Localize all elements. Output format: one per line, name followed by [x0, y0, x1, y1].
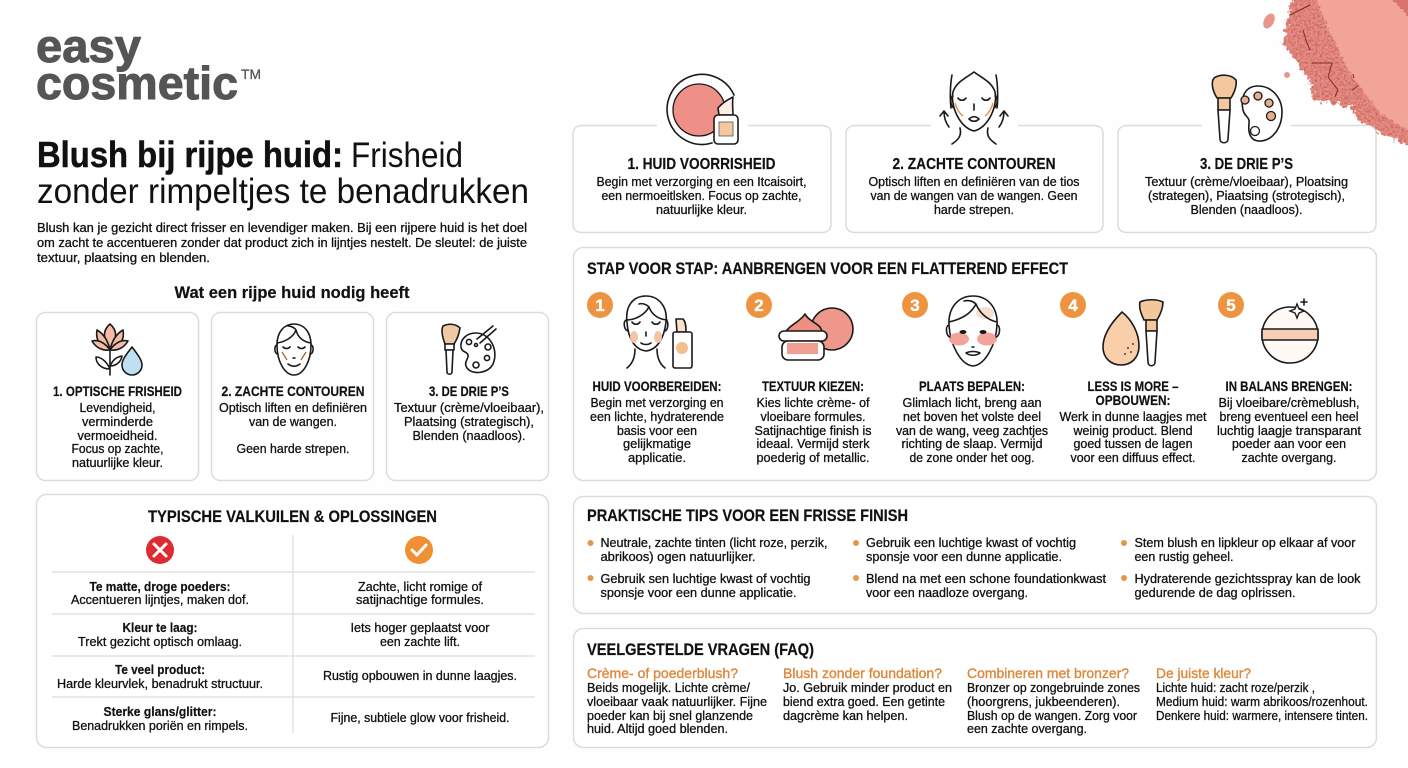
badge 4: 4 — [1068, 296, 1078, 315]
step 5 text: breng eventueel een heel — [1220, 409, 1359, 424]
logo: TM — [241, 66, 261, 82]
intro text: textuur, plaatsing en blenden. — [37, 250, 210, 265]
panel heading: TYPISCHE VALKUILEN & OPLOSSINGEN — [148, 508, 437, 526]
faq: zonder foundation: Jo. Gebruik minder product en — [783, 680, 952, 695]
row: kleur te laag: een zachte lift. — [380, 634, 460, 649]
step 1 text — [590, 378, 724, 465]
faq: creme of poeder: Crème- of poederblush? — [587, 665, 738, 681]
step 3 text: richting de slaap. Vermijd — [902, 436, 1042, 451]
heading: what mature skin needs: Wat een rijpe huid nodig heeft — [174, 283, 410, 302]
step 1 text: gelijkmatige — [623, 436, 691, 451]
logo: easy — [36, 20, 141, 72]
icon: powder puff with sparkle — [1262, 299, 1318, 363]
faq: bronzer: Combineren met bronzer? — [967, 665, 1129, 681]
row: sterke glans: Sterke glans/glitter: — [104, 704, 216, 719]
step 5 text: IN BALANS BRENGEN: — [1226, 378, 1352, 394]
row: te veel product — [57, 662, 517, 691]
faq: juiste kleur — [1156, 665, 1368, 723]
text block: 1. HUID VOORRISHEID — [628, 156, 776, 173]
step 2 text: vloeibare formules. — [760, 409, 866, 424]
text block — [219, 383, 367, 456]
faq: juiste kleur: De juiste kleur? — [1156, 665, 1251, 681]
badge 3 — [902, 292, 928, 318]
step 3 text — [896, 378, 1048, 465]
text block: vermoeidheid. — [78, 428, 158, 443]
text block: Focus op zachte, — [72, 441, 164, 456]
tip column 3: Stem blush en lipkleur op elkaar af voor — [1134, 535, 1356, 550]
text block: verminderde — [82, 414, 153, 429]
text block: Optisch liften en definiëren van de tios — [868, 174, 1080, 189]
icon: face with lifting arrows — [940, 72, 1008, 144]
step 3 text: van de wang, veeg zachtjes — [896, 423, 1048, 438]
text block — [1145, 156, 1348, 217]
row: sterke glans: Benadrukken poriën en rimpels. — [72, 718, 248, 733]
text block: Levendigheid, — [80, 400, 156, 415]
step 2 text — [754, 378, 872, 465]
text block: harde strepen. — [934, 202, 1014, 217]
text block — [868, 156, 1080, 217]
step 3 text: net boven het volste deel — [903, 409, 1041, 424]
faq: zonder foundation: dagcrème kan helpen. — [783, 708, 908, 723]
icon: face with cheek placement — [946, 296, 1000, 366]
tip column 1: sponsje voor een dunne applicatie. — [600, 585, 796, 600]
step 3 text: de zone onder het oog. — [910, 450, 1034, 465]
faq: creme of poeder: vloeibaar vaak natuurlijker. Fijne — [587, 694, 767, 709]
title: zonder rimpeltjes te benadrukken — [37, 172, 529, 211]
icon: blush and bottle — [667, 74, 738, 144]
blush powder swatch — [1261, 0, 1408, 150]
step 2 text: Satijnachtige finish is — [754, 423, 872, 438]
row: te veel product: Te veel product: — [115, 662, 205, 677]
faq: juiste kleur: Lichte huid: zacht roze/perzik , — [1156, 680, 1315, 695]
badge 2 — [746, 292, 772, 318]
panel: huid voorrisheid — [573, 74, 831, 232]
tip column 2: voor een naadloze overgang. — [866, 585, 1028, 600]
row: te veel product: Harde kleurvlek, benadrukt structuur. — [57, 676, 263, 691]
text block: 2. ZACHTE CONTOUREN — [222, 383, 364, 399]
faq: creme of poeder — [587, 665, 767, 736]
step 1 — [587, 292, 724, 465]
row: sterke glans: Fijne, subtiele glow voor frisheid. — [330, 710, 510, 725]
step 3 text: Glimlach licht, breng aan — [902, 395, 1042, 410]
badge 5 — [1218, 292, 1244, 318]
faq: bronzer: een zachte overgang. — [967, 721, 1087, 736]
step 4 text — [1060, 378, 1207, 465]
text block: Geen harde strepen. — [236, 441, 350, 456]
step 5 text: poeder aan voor een — [1232, 436, 1346, 451]
step 3 — [896, 292, 1048, 465]
step 4 text: voor een diffuus effect. — [1070, 450, 1196, 465]
panel heading: PRAKTISCHE TIPS VOOR EEN FRISSE FINISH — [587, 506, 908, 525]
text block: 3. DE DRIE P’S — [429, 383, 509, 399]
faq: juiste kleur: Denkere huid: warmere, intensere tinten. — [1156, 708, 1368, 723]
panel heading: STAP VOOR STAP: AANBRENGEN VOOR EEN FLATTEREND EFFECT — [587, 259, 1069, 278]
text block: 3. DE DRIE P’S — [1200, 156, 1293, 173]
row: te matte poeders: Zachte, licht romige of — [358, 579, 482, 594]
step 2 text: poederig of metallic. — [756, 450, 870, 465]
step 2 text: Kies lichte crème- of — [756, 395, 870, 410]
step 1 text: Begin met verzorging en — [590, 395, 724, 410]
badge 2: 2 — [754, 296, 764, 315]
row: te matte poeders — [71, 579, 484, 607]
step 4 — [1060, 292, 1207, 465]
icon: lotus and water drop — [92, 324, 142, 375]
badge 5: 5 — [1226, 296, 1236, 315]
tip column 1: Gebruik sen luchtige kwast of vochtig — [600, 571, 810, 586]
badge 3: 3 — [910, 296, 920, 315]
step 4 text: goed tussen de lagen — [1074, 436, 1192, 451]
panel: zachte contouren — [212, 312, 374, 480]
text block: Textuur (crème/vloeibaar), Ploatsing — [1145, 174, 1348, 189]
icon: face and bottle — [624, 296, 692, 368]
faq: creme of poeder: Beids mogelijk. Lichte crème/ — [587, 680, 750, 695]
step 5 text: luchtig laagje transparant — [1217, 423, 1361, 438]
tip column 2: Blend na met een schone foundationkwast — [866, 571, 1106, 586]
text block: 2. ZACHTE CONTOUREN — [892, 156, 1056, 173]
tip column 3 — [1121, 535, 1361, 600]
icon: brush and palette — [442, 324, 496, 374]
text block: Plaatsing (strategisch), — [404, 414, 534, 429]
faq: bronzer: (hoorgrens, jukbeenderen). — [967, 694, 1120, 709]
text block: Begin met verzorging en een Itcaisoirt, — [596, 174, 806, 189]
panel: stap voor stap — [574, 248, 1376, 480]
logo: cosmetic — [36, 57, 238, 109]
tip column 2: Gebruik een luchtige kwast of vochtig — [866, 535, 1076, 550]
text block — [394, 383, 544, 443]
icon: sponge and brush — [1103, 300, 1163, 366]
text block: een nermoeitlsken. Focus op zachte, — [602, 188, 802, 203]
panel: praktische tips — [574, 496, 1376, 614]
icon: cream jar and compact — [779, 308, 853, 360]
faq: creme of poeder: huid. Altijd goed blenden. — [587, 721, 728, 736]
icon: cross — [146, 536, 174, 564]
step 4 text: Werk in dunne laagjes met — [1060, 409, 1207, 424]
intro text — [37, 220, 527, 265]
row: kleur te laag: Trekt gezicht optisch omlaag. — [78, 634, 242, 649]
row: te matte poeders: satijnachtige formules. — [356, 592, 484, 607]
panel: typische valkuilen en oplossingen — [36, 494, 548, 748]
faq: zonder foundation: Blush zonder foundation? — [783, 665, 942, 681]
intro text: om zacht te accentueren zonder dat product zich in lijntjes nestelt. De sleutel: de juiste — [37, 235, 527, 250]
faq: bronzer — [967, 665, 1140, 736]
tip column 3: gedurende de dag oplrissen. — [1134, 585, 1296, 600]
faq: bronzer: Bronzer op zongebruinde zones — [967, 680, 1140, 695]
title: Frisheid — [351, 136, 463, 175]
text block: Blenden (naadloos). — [1190, 202, 1302, 217]
text block: 1. OPTISCHE FRISHEID — [53, 383, 182, 399]
text block: natuurlijke kleur. — [656, 202, 747, 217]
faq: juiste kleur: Medium huid: warm abrikoos/rozenhout. — [1156, 694, 1368, 709]
title: Blush bij rijpe huid: — [37, 134, 343, 175]
step 5 text: zachte overgang. — [1242, 450, 1336, 465]
panel heading: VEELGESTELDE VRAGEN (FAQ) — [587, 640, 814, 659]
row: te matte poeders: Accentueren lijntjes, maken dof. — [71, 592, 249, 607]
faq: zonder foundation — [783, 665, 952, 723]
step 1 text: HUID VOORBEREIDEN: — [592, 378, 722, 394]
text block — [596, 156, 806, 217]
panel: optische frisheid — [36, 312, 198, 480]
step 4 text: OPBOUWEN: — [1096, 392, 1170, 408]
row: kleur te laag: Kleur te laag: — [122, 620, 198, 635]
tip column 2 — [853, 535, 1106, 600]
text block: Optisch liften en definiëren — [219, 400, 367, 415]
row: sterke glans — [72, 704, 510, 733]
panel: zachte contouren top — [846, 72, 1103, 232]
tip column 3: Hydraterende gezichtsspray kan de look — [1134, 571, 1361, 586]
step 2 — [746, 292, 872, 465]
text block: (strategen), Piaatsing (strotegisch), — [1148, 188, 1345, 203]
badge 1: 1 — [595, 296, 605, 315]
text block — [53, 383, 182, 470]
step 1 text: applicatie. — [628, 450, 686, 465]
icon: face — [275, 324, 313, 375]
faq: zonder foundation: biend extra goed. Een getinte — [783, 694, 945, 709]
step 4 text: LESS IS MORE – — [1088, 378, 1179, 394]
tip column 1: abrikoos) ogen natuurlijker. — [600, 549, 756, 564]
tip column 1: Neutrale, zachte tinten (licht roze, perzik, — [600, 535, 828, 550]
icon: check — [405, 536, 433, 564]
panel: faq — [574, 628, 1376, 748]
tip column 3: een rustig geheel. — [1134, 549, 1234, 564]
row: te veel product: Rustig opbouwen in dunne laagjes. — [323, 668, 517, 683]
panel: de drie p's — [386, 312, 548, 480]
intro text: Blush kan je gezicht direct frisser en levendiger maken. Bij een rijpere huid is het doel — [37, 220, 527, 235]
text block: Textuur (crème/vloeibaar), — [394, 400, 544, 415]
step 2 text: TEXTUUR KIEZEN: — [762, 378, 864, 394]
badge 1 — [587, 292, 613, 318]
icon: brush and palette — [1212, 75, 1282, 143]
step 2 text: ideaal. Vermijd sterk — [756, 436, 870, 451]
row: kleur te laag — [78, 620, 490, 649]
step 5 — [1217, 292, 1361, 465]
text block: van de wangen van de wangen. Geen — [870, 188, 1078, 203]
panel: de drie p's top — [1118, 75, 1376, 232]
step 1 text: basis voor een — [617, 423, 697, 438]
badge 4 — [1060, 292, 1086, 318]
step 5 text — [1217, 378, 1361, 465]
tip column 1 — [588, 535, 828, 600]
step 5 text: Bij vloeibare/crèmeblush, — [1218, 395, 1360, 410]
title — [37, 134, 529, 211]
text block: natuurlijke kleur. — [72, 455, 163, 470]
text block: van de wangen. — [249, 414, 337, 429]
step 3 text: PLAATS BEPALEN: — [919, 378, 1025, 394]
tip column 2: sponsje voor een dunne applicatie. — [866, 549, 1062, 564]
faq: bronzer: Blush op de wangen. Zorg voor — [967, 708, 1138, 723]
row: te matte poeders: Te matte, droge poeders: — [90, 579, 230, 594]
faq: creme of poeder: poeder kan bij snel glanzende — [587, 708, 753, 723]
row: kleur te laag: Iets hoger geplaatst voor — [350, 620, 490, 635]
logo — [36, 20, 261, 109]
text block: Blenden (naadloos). — [412, 428, 526, 443]
step 4 text: weinig product. Blend — [1073, 423, 1192, 438]
step 1 text: een lichte, hydraterende — [590, 409, 724, 424]
